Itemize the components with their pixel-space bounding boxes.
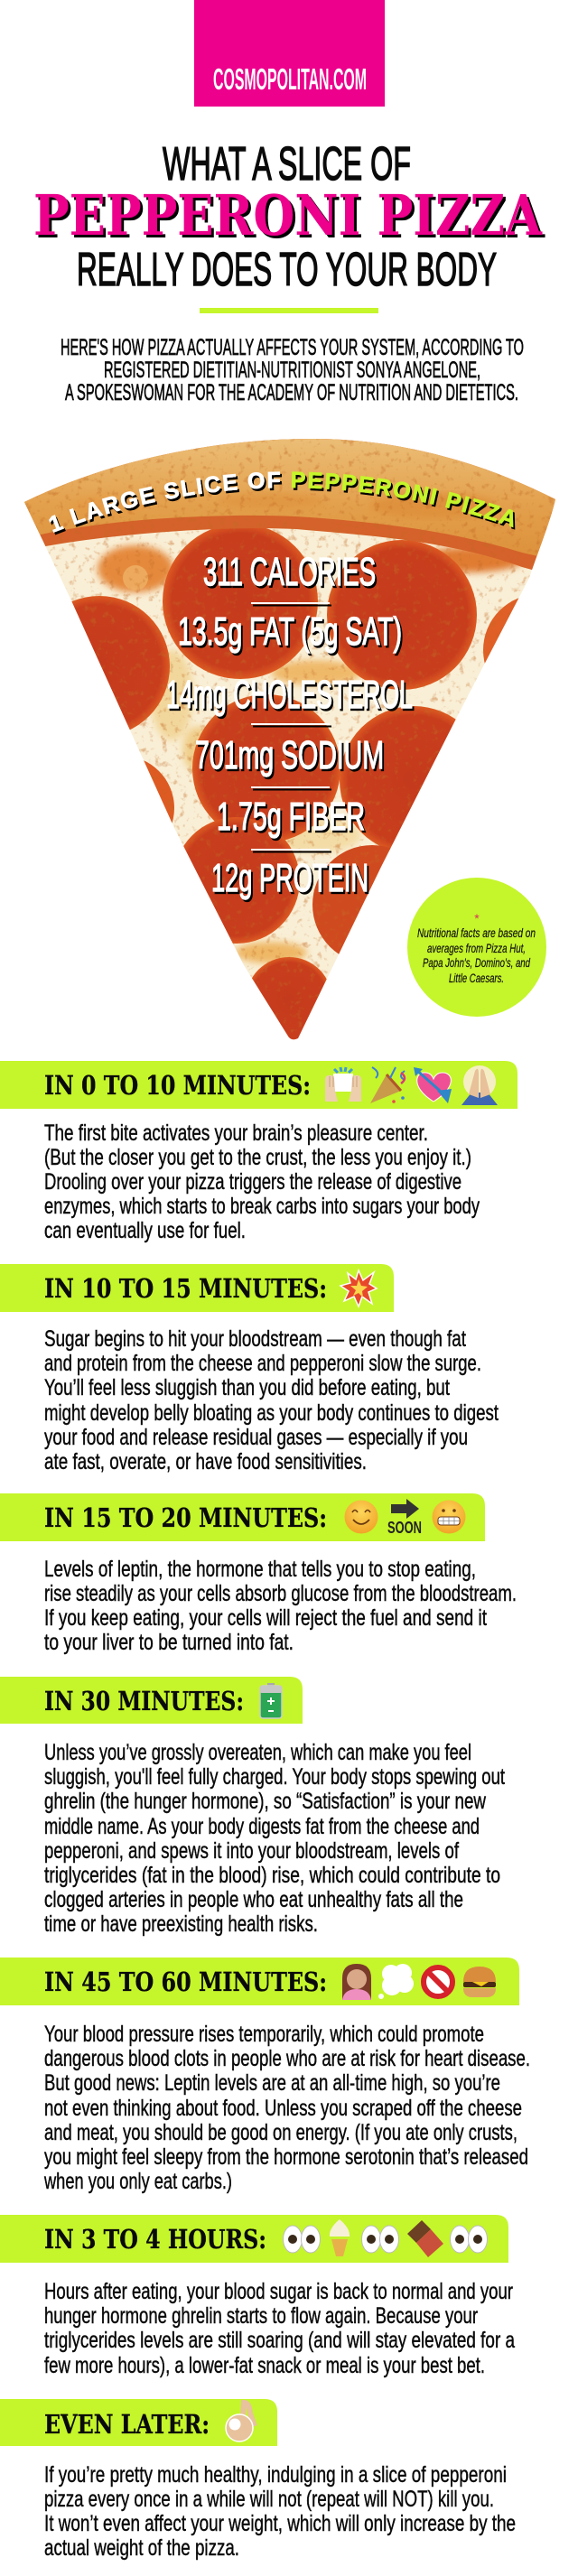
section: 30 minutes (0, 1677, 303, 1724)
icon: collision (340, 1270, 377, 1307)
section: 10 to 15 minutes (0, 1264, 394, 1312)
section: 15 to 20 minutes (0, 1493, 485, 1541)
body text: 15 to 20 minutes: to your liver to be turned into fat. (44, 1630, 294, 1655)
icon: prohibited sign (424, 1967, 452, 1996)
section: 45 to 60 minutes: IN 45 TO 60 MINUTES: (44, 1967, 327, 1997)
nutrition facts: 701mg SODIUM (195, 733, 384, 777)
icon: chocolate bar (407, 2220, 443, 2257)
body text: 0 to 10 minutes (44, 1121, 480, 1243)
icon: ice cream (330, 2219, 350, 2256)
section: 0 to 10 minutes: IN 0 TO 10 MINUTES: (44, 1070, 311, 1101)
body text: even later (44, 2462, 516, 2561)
section: 0 to 10 minutes (0, 1061, 517, 1109)
body text: 45 to 60 minutes (43, 2022, 530, 2194)
icon: eyes (361, 2226, 399, 2253)
logo block: COSMOPOLITAN.COM (213, 62, 367, 96)
icon: thought bubble (378, 1964, 414, 1999)
section: 30 minutes: IN 30 MINUTES: (44, 1686, 244, 1716)
logo block (194, 0, 385, 107)
icon: soon arrow: SOON (387, 1519, 422, 1537)
body text: 10 to 15 minutes (44, 1326, 499, 1474)
section: 10 to 15 minutes: IN 10 TO 15 MINUTES: (44, 1273, 327, 1304)
footnote circle: * (474, 911, 480, 925)
curved label: 1 LARGE SLICE OF PEPPERONI PIZZA (49, 471, 515, 535)
icon: eyes (450, 2226, 488, 2253)
nutrition facts: 1.75g FIBER (217, 795, 365, 839)
title (33, 138, 543, 296)
icon: smiling face (345, 1501, 378, 1533)
icon: heart with arrow (414, 1067, 452, 1103)
footnote circle: Little Caesars. (449, 972, 504, 985)
icon: battery (260, 1683, 282, 1718)
icon: raised hands (325, 1067, 361, 1102)
icon: grimacing face (432, 1501, 466, 1533)
footnote circle: Papa John's, Domino's, and (423, 956, 530, 970)
nutrition facts: 13.5g FAT (5g SAT) (178, 609, 402, 654)
footnote circle: Nutritional facts are based on (417, 926, 536, 940)
body text: 45 to 60 minutes: when you only eat carbs.) (43, 2169, 232, 2194)
section: 45 to 60 minutes (0, 1958, 519, 2005)
body text: 3 to 4 hours (44, 2279, 515, 2378)
section: 3 to 4 hours: IN 3 TO 4 HOURS: (44, 2224, 266, 2255)
icon: eyes (284, 2226, 320, 2253)
footnote circle: averages from Pizza Hut, (427, 942, 526, 955)
icon: burger (463, 1967, 496, 1997)
icon: woman (342, 1964, 371, 2000)
nutrition facts: 311 CALORIES (203, 550, 376, 594)
icon: party popper (370, 1067, 405, 1103)
body text: 0 to 10 minutes: can eventually use for fuel. (44, 1218, 246, 1243)
intro text (61, 335, 524, 405)
section: even later (0, 2399, 277, 2446)
nutrition facts (166, 550, 413, 900)
section: even later: EVEN LATER: (44, 2409, 210, 2440)
nutrition facts: 14mg CHOLESTEROL (166, 673, 413, 717)
nutrition facts: 12g PROTEIN (211, 856, 368, 900)
pizza slice illustration (24, 439, 555, 1040)
body text: 10 to 15 minutes: You’ll feel less sluggish than you did before eating, but (44, 1375, 450, 1400)
title: WHAT A SLICE OF (163, 138, 411, 191)
icon: OK hand (226, 2403, 255, 2441)
body text: 15 to 20 minutes (44, 1557, 517, 1655)
body text: 30 minutes (44, 1740, 505, 1937)
section: 3 to 4 hours (0, 2215, 508, 2263)
body text: 30 minutes: time or have preexisting health risks. (44, 1911, 318, 1937)
icon: soon arrow (387, 1499, 422, 1537)
body text: 10 to 15 minutes: ate fast, overate, or have food sensitivities. (44, 1449, 367, 1474)
body text: even later: actual weight of the pizza. (44, 2535, 239, 2561)
section: 15 to 20 minutes: IN 15 TO 20 MINUTES: (44, 1502, 327, 1533)
icon: praying hands (461, 1065, 498, 1105)
footnote circle (407, 878, 546, 1017)
body text: 0 to 10 minutes: The first bite activates your brain’s pleasure center. (44, 1121, 428, 1146)
